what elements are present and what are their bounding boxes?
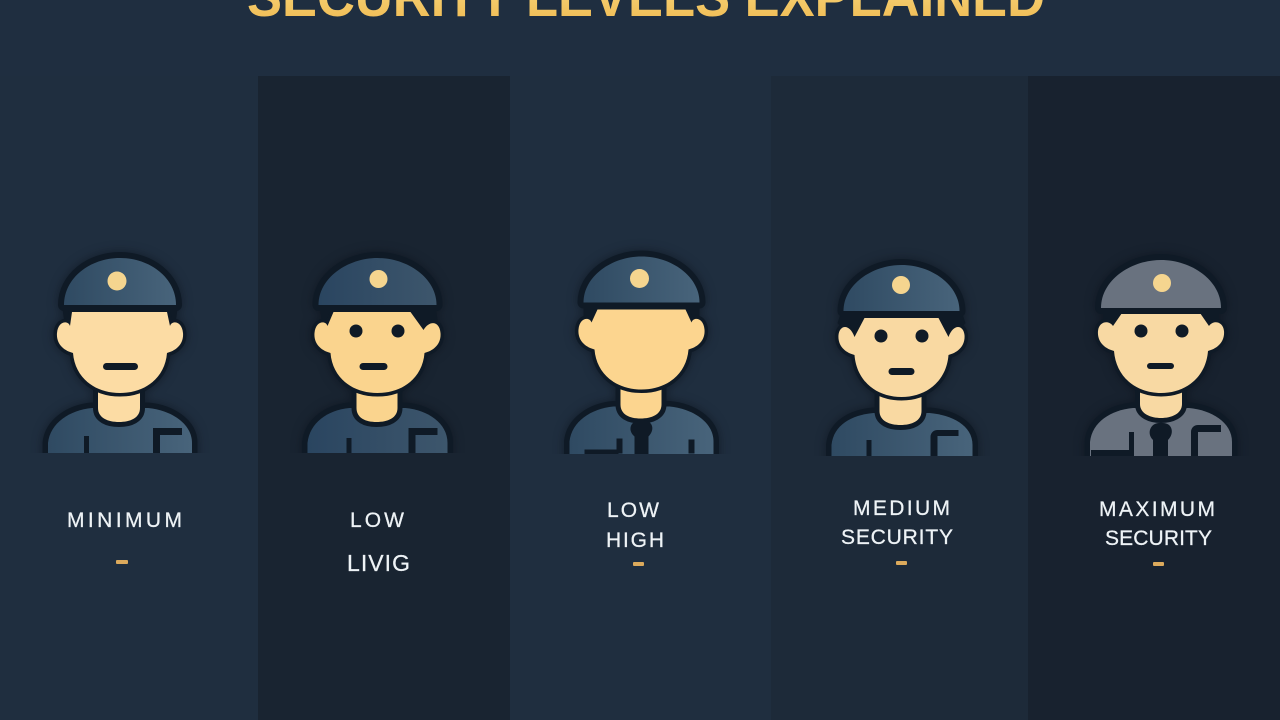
panel: low high	[562, 248, 722, 566]
label: low: LOW	[607, 499, 660, 522]
label: security: SECURITY	[1105, 527, 1213, 550]
panel: minimum security	[40, 250, 200, 564]
figure: medium officer	[832, 265, 972, 480]
figure: maximum officer	[1090, 260, 1232, 475]
label: maximum: MAXIMUM	[1099, 498, 1216, 521]
panel: medium security	[818, 250, 986, 565]
panel: low	[258, 76, 510, 720]
label: high: HIGH	[606, 529, 665, 552]
figure: low officer	[308, 258, 448, 473]
panel: maximum security	[1028, 76, 1280, 720]
dash	[633, 562, 644, 566]
dash	[896, 561, 907, 565]
label: minimum: MINIMUM	[67, 509, 183, 532]
dash	[1153, 562, 1164, 566]
figure: minimum officer	[48, 258, 192, 473]
label: medium: MEDIUM	[853, 497, 951, 520]
label: security: SECURITY	[841, 526, 954, 549]
dash	[116, 560, 128, 564]
label: livig: LIVIG	[347, 550, 411, 576]
label: low: LOW	[350, 509, 405, 532]
header band	[0, 0, 1280, 76]
figure: low high officer	[570, 256, 714, 472]
